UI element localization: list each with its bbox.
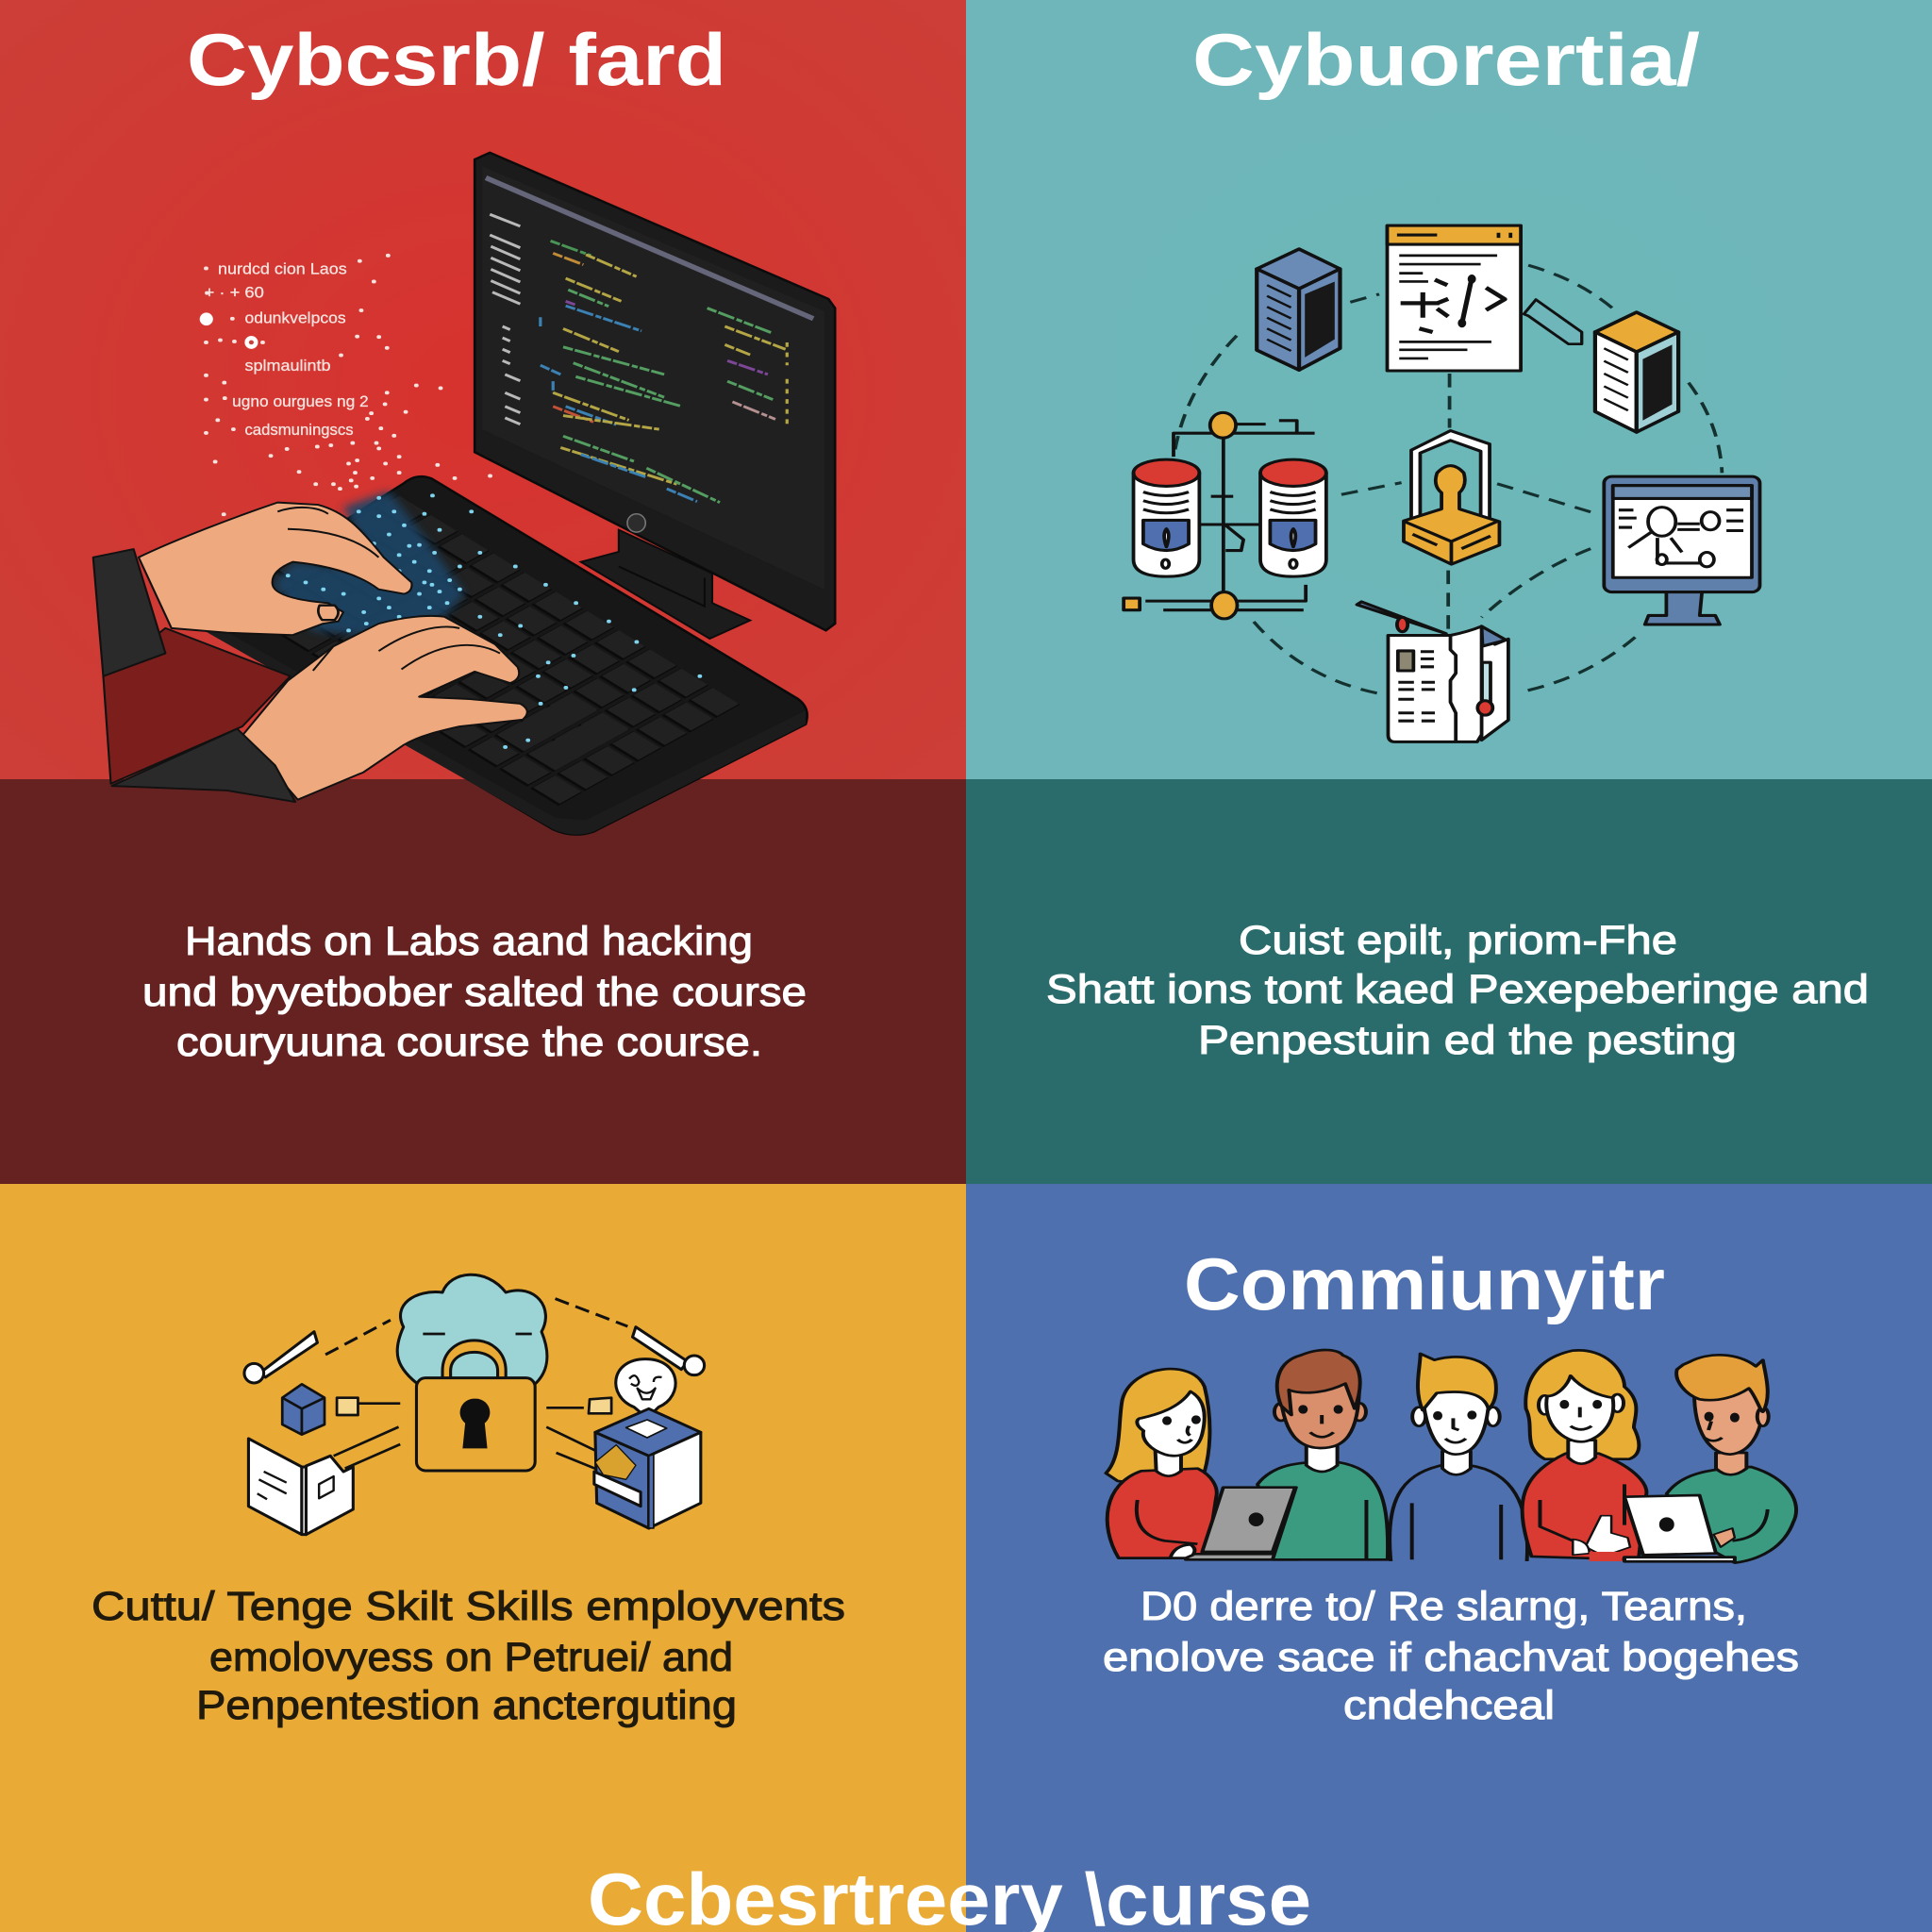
dashed links	[325, 1299, 627, 1355]
floating code text	[200, 256, 491, 514]
glowing blue key particles	[273, 491, 464, 635]
body text: blue panel: cndehceal	[1343, 1683, 1555, 1728]
body text: blue panel: enolove sace if chachvat bogehes	[1103, 1635, 1799, 1680]
lower hand and sleeve	[112, 616, 527, 802]
person 3	[1390, 1354, 1527, 1561]
panel: yellow security skills	[0, 1184, 966, 1932]
monitor	[475, 153, 835, 630]
cloud	[397, 1274, 547, 1387]
database cylinders and wiring	[1124, 412, 1326, 619]
body text: teal panel: Cuist epilt, priom-Fhe	[1239, 918, 1677, 963]
floating code text: splmaulintb	[244, 357, 331, 375]
server blue	[1257, 249, 1340, 370]
monitor	[1604, 476, 1759, 625]
keyboard	[192, 476, 808, 835]
body text: yellow panel: Penpentestion ancterguting	[196, 1683, 737, 1728]
right handle	[632, 1327, 688, 1370]
open document with pen	[1357, 602, 1508, 741]
connector squares and lines	[334, 1398, 611, 1474]
code lines on screen	[490, 214, 787, 503]
person 5	[1624, 1355, 1796, 1563]
heading: red panel: Cybcsrb/ fard	[187, 18, 726, 101]
heading: community: Commiunyitr	[1184, 1242, 1665, 1325]
heading: teal panel: Cybuorertia/	[1192, 18, 1700, 101]
open book box	[248, 1439, 353, 1535]
monitor stand	[581, 530, 750, 639]
panel: blue community	[966, 1184, 1932, 1932]
floating code text: ugno ourgues ng 2	[232, 392, 369, 410]
server white	[1595, 312, 1678, 432]
illustration: five people with laptops	[1106, 1350, 1796, 1563]
upper hand and sleeve	[93, 503, 411, 784]
central lock	[1404, 431, 1499, 564]
panel: teal network	[966, 0, 1932, 1184]
pin marker	[616, 1359, 675, 1418]
body text: yellow panel: emolovyess on Petruei/ and	[209, 1635, 733, 1680]
floating code text: nurdcd cion Laos	[218, 260, 347, 278]
illustration: network diagram	[1124, 225, 1759, 741]
isometric box	[594, 1408, 701, 1528]
body text: teal panel	[1046, 918, 1869, 1063]
body text: blue panel	[1103, 1584, 1799, 1728]
arrow between window and server	[1524, 300, 1582, 344]
person 2	[1257, 1350, 1388, 1559]
floating code text: odunkvelpcos	[244, 308, 346, 326]
person 4	[1523, 1350, 1646, 1561]
body text: red panel: und byyetbober salted the course	[142, 970, 807, 1015]
body text: teal panel: Shatt ions tont kaed Pexepeberinge and	[1046, 967, 1869, 1012]
body text: red panel	[142, 919, 807, 1065]
floating code text: + · + 60	[205, 283, 264, 301]
body text: blue panel: D0 derre to/ Re slarng, Tearns,	[1141, 1584, 1747, 1629]
body text: red panel: couryuuna course the course.	[176, 1020, 762, 1065]
code document window	[1388, 225, 1521, 371]
person 1	[1106, 1369, 1298, 1559]
body text: teal panel: Penpestuin ed the pesting	[1198, 1018, 1737, 1063]
dashed connections	[1174, 265, 1722, 693]
cube icon	[282, 1384, 325, 1435]
illustration: cloud lock and boxes	[244, 1274, 705, 1535]
left handle	[260, 1332, 317, 1377]
panel: red hands-on labs	[0, 0, 966, 1184]
illustration: hands typing at computer	[93, 153, 835, 835]
body text: yellow panel: Cuttu/ Tenge Skilt Skills employvents	[92, 1584, 845, 1629]
body text: yellow panel	[92, 1584, 845, 1728]
floating code text: cadsmuningscs	[244, 421, 354, 439]
padlock	[416, 1341, 535, 1471]
body text: red panel: Hands on Labs aand hacking	[185, 919, 753, 964]
